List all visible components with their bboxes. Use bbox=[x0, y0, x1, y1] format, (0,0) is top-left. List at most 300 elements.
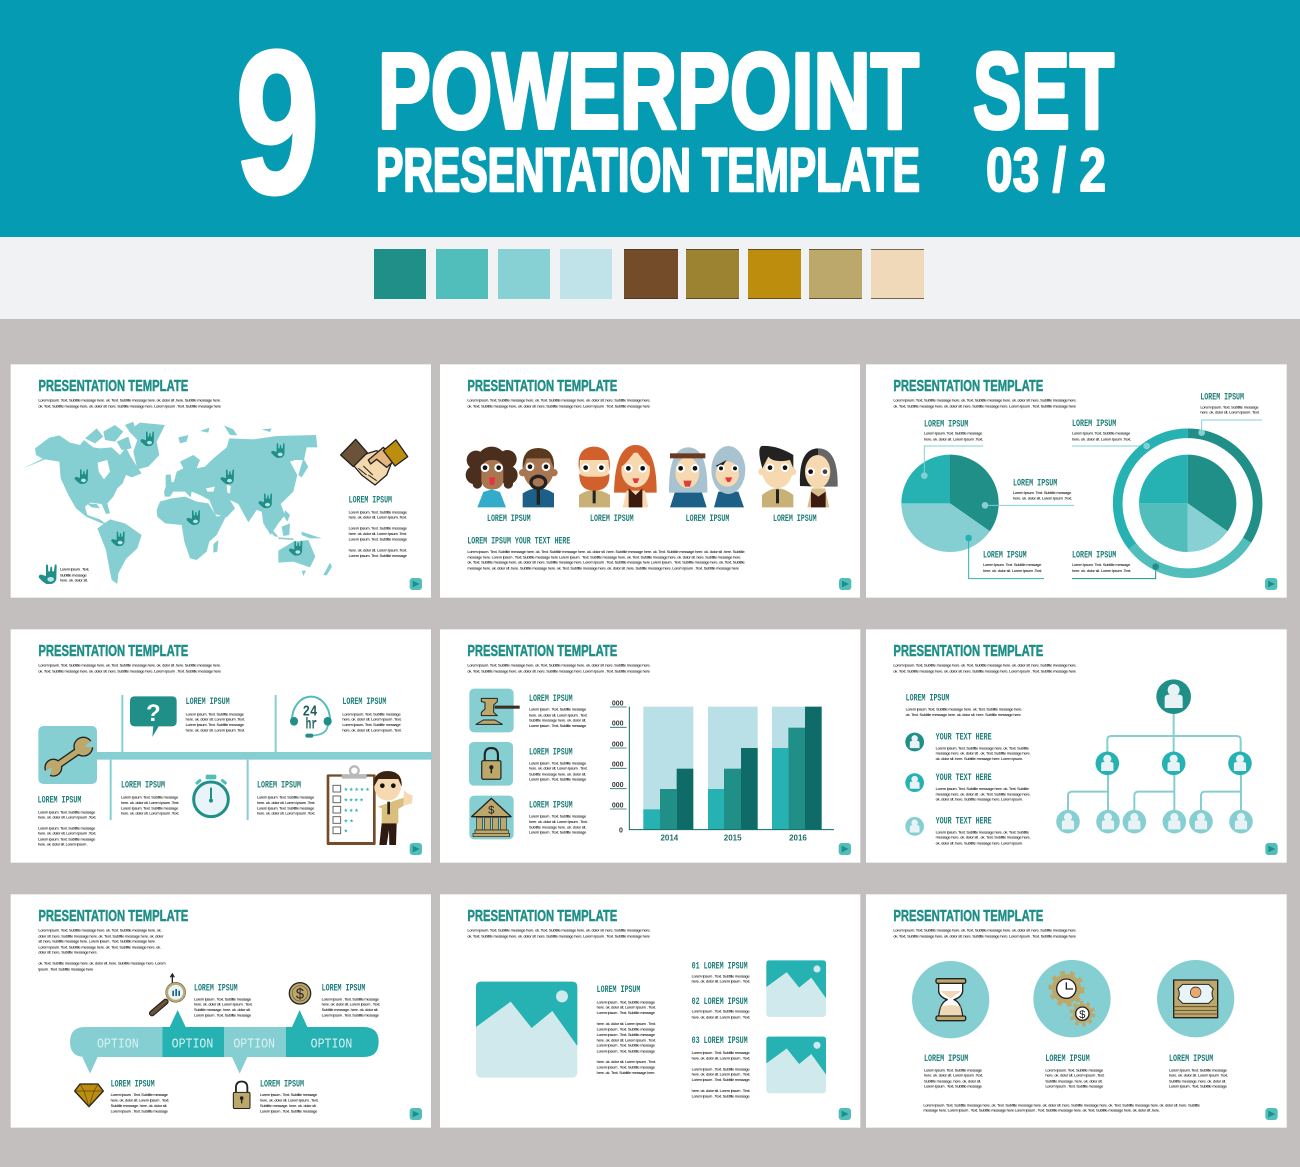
slide title: PRESENTATION TEMPLATE bbox=[467, 908, 617, 925]
axis labels: 0 bbox=[619, 827, 623, 834]
item 03: Lorem ipsum . Text. Subtitle message bbox=[692, 1066, 750, 1071]
world map bbox=[23, 422, 332, 584]
block text: question bbox=[186, 696, 245, 733]
icon: bank bbox=[469, 796, 514, 839]
text block: padlock: Lorem ipsum . Text. Subtitle message bbox=[529, 777, 587, 782]
text block: bank: Subtitle message here. ok. dolor sit. bbox=[529, 824, 586, 829]
image placeholder large bbox=[476, 982, 577, 1078]
text block: hourglass: here. ok. dolor sit. Lorem ipsum .Text. bbox=[924, 1073, 983, 1078]
icon: magnifier bbox=[152, 974, 185, 1013]
year labels: 2016 bbox=[789, 834, 807, 843]
block text: stopwatch: here. ok. dolor sit. Lorem ipsum .Text. bbox=[121, 800, 179, 805]
list item one: YOUR TEXT HERE bbox=[936, 731, 992, 742]
text block: padlock bbox=[529, 746, 588, 782]
bottom paragraph: message here. Lorem ipsum . Text. Subtitle message here Lorem ipsum . Text. Subtitle message here. ok. Text. Subtitle message here. ok. dolor sit .here. bbox=[923, 1108, 1160, 1113]
block text: stopwatch: LOREM IPSUM bbox=[121, 780, 165, 791]
text block: gears: Lorem ipsum . Text. Subtitle message bbox=[1045, 1084, 1104, 1089]
text block: magnifier: Subtitle message. here. ok. dolor sit. bbox=[194, 1007, 251, 1012]
option labels: OPTION bbox=[172, 1037, 213, 1053]
item 03: here. ok. dolor sit. Lorem ipsum . Text. bbox=[692, 1072, 750, 1077]
icon: stopwatch bbox=[194, 775, 228, 817]
icon: clipboard: ★ bbox=[344, 829, 349, 835]
callout text: top left bbox=[924, 418, 983, 441]
lower paragraph: message here. ok. dolor sit .here. Subtitle message here. ok. Text. Subtitle message here. ok. dolor sit .here. Subtitle message here. Lorem ipsum . Text. Subtitle message here bbox=[467, 565, 740, 570]
block text: question: LOREM IPSUM bbox=[186, 696, 230, 707]
callout text: donut bottom: here. ok. dolor sit. Lorem ipsum .Text. bbox=[1072, 568, 1131, 573]
left block text: LOREM IPSUM bbox=[38, 794, 81, 805]
slide title: PRESENTATION TEMPLATE bbox=[893, 378, 1043, 395]
axis labels: 000 bbox=[612, 802, 624, 809]
center text block: here. ok. dolor sit. Lorem ipsum . Text. bbox=[597, 1005, 656, 1010]
callout text: top left: Lorem ipsum. Text. Subtitle message bbox=[924, 431, 983, 436]
person: bearded man bbox=[579, 447, 610, 507]
slide subtitle bbox=[893, 398, 1077, 409]
callout text: middle bbox=[1013, 478, 1072, 501]
panel: world map slide bbox=[11, 364, 431, 598]
text block: money bbox=[1169, 1053, 1228, 1089]
axis labels: 000 bbox=[612, 741, 624, 748]
slide paragraph: Lorem ipsum. Text. Subtitle message here. ok. Text. Subtitle message here. ok. bbox=[38, 944, 161, 949]
center text block: Lorem ipsum . Text. Subtitle message bbox=[597, 1043, 656, 1048]
text block: padlock: Subtitle message here. ok. dolor sit. bbox=[529, 771, 586, 776]
icon: 24 hour headset: 24 bbox=[303, 705, 317, 721]
text block: diamond: here. ok. dolor sit. Lorem ipsum . Text. bbox=[111, 1098, 169, 1103]
callout text: donut bottom: Lorem ipsum. Text. Subtitle message bbox=[1072, 562, 1131, 567]
side heading: LOREM IPSUM bbox=[349, 495, 392, 506]
text block: padlock bbox=[260, 1078, 319, 1114]
list icon: dark person bbox=[905, 733, 924, 751]
slide paragraph: ok. Text. Subtitle message here. ok. dolor sit .here. Subtitle message here. Lorem bbox=[38, 961, 166, 966]
center text block: here. ok. Text. Subtitle message here. bbox=[597, 1070, 655, 1075]
callout text: donut top right: Lorem ipsum. Text. Subtitle message bbox=[1200, 404, 1259, 409]
list item two: ok. dolor sit .here. Subtitle message here. Lorem ipsum. bbox=[936, 797, 1023, 802]
callout text: bottom left bbox=[983, 550, 1042, 573]
slide paragraph: dolor sit .here. Subtitle message here. bbox=[38, 950, 98, 955]
list item two bbox=[936, 772, 1031, 802]
left block text: Lorem ipsum. Text. Subtitle message bbox=[38, 836, 96, 841]
headline: powerpoint: POWERPOINT bbox=[378, 30, 919, 151]
slide subtitle: ok. Text. Subtitle message here. ok. dolor sit .here. Subtitle message here. Lorem ipsum . Text. Subtitle message here bbox=[38, 404, 222, 409]
slide subtitle bbox=[893, 928, 1077, 939]
year labels: 2014 bbox=[660, 834, 679, 843]
callout text: bottom left: LOREM IPSUM bbox=[983, 550, 1027, 561]
axis ticks bbox=[610, 707, 627, 809]
text block: padlock: here. ok. dolor sit. Lorem ipsum . Text. bbox=[529, 766, 588, 771]
people captions: LOREM IPSUM bbox=[487, 513, 531, 524]
left block text: here. ok. dolor sit. Lorem ipsum .Text. bbox=[38, 831, 96, 836]
item 02: here. ok. dolor sit. Lorem ipsum . Text. bbox=[692, 1014, 750, 1019]
subheading: 03 / 2: 03 / 2 bbox=[986, 136, 1106, 204]
text block: diamond: Subtitle message. here. ok. dolor sit. bbox=[111, 1103, 167, 1108]
item 01: here. ok. dolor sit. Lorem ipsum . Text. bbox=[692, 979, 750, 984]
list icon: teal person bbox=[905, 773, 924, 792]
side text: Lorem ipsum. Text. Subtitle message bbox=[349, 525, 408, 530]
item 03: Lorem ipsum . Text. Subtitle message bbox=[692, 1094, 750, 1099]
side text: here. ok. dolor sit. Lorem ipsum .Text. bbox=[349, 531, 407, 536]
list item one: ok. dolor sit .here. Subtitle message here. Lorem ipsum. bbox=[936, 756, 1023, 761]
text block: hourglass: Subtitle message. here. ok. dolor sit. bbox=[924, 1078, 981, 1083]
person: red hair woman bbox=[614, 445, 657, 507]
center text block: Lorem ipsum . Text. Subtitle message bbox=[597, 1048, 656, 1053]
panel: bar chart slide bbox=[440, 629, 860, 863]
left block text: here. ok. dolor sit. Lorem ipsum . bbox=[38, 842, 88, 847]
icon: gears: $ bbox=[1079, 1009, 1086, 1021]
slide subtitle bbox=[467, 663, 651, 674]
text block: padlock: Lorem ipsum . Text. Subtitle message bbox=[260, 1092, 318, 1097]
list item one: Lorem ipsum. Text. Subtitle message here. ok. Text. Subtitle bbox=[936, 745, 1030, 750]
block text: checklist: here. ok. dolor sit. Lorem ipsum .Text. bbox=[257, 811, 315, 816]
text block: gavel: LOREM IPSUM bbox=[529, 693, 573, 704]
text block: hourglass: LOREM IPSUM bbox=[924, 1053, 968, 1064]
callout text: donut bottom: LOREM IPSUM bbox=[1072, 550, 1116, 561]
item 03: 03 LOREM IPSUM bbox=[692, 1035, 748, 1046]
text block: hourglass: Lorem ipsum . Text. Subtitle message bbox=[924, 1084, 983, 1089]
top node bbox=[1156, 679, 1191, 714]
slide subtitle: ok. Text. Subtitle message here. ok. dolor sit .here. Subtitle message here. Lorem ipsum . Text. Subtitle message here bbox=[467, 404, 651, 409]
text block: gears bbox=[1045, 1053, 1105, 1089]
callout text: donut upper left bbox=[1072, 418, 1131, 441]
option labels: OPTION bbox=[97, 1037, 139, 1053]
item 03: here. ok. dolor sit. Lorem ipsum . Text. bbox=[692, 1055, 750, 1060]
text block: coin: Lorem ipsum . Text. Subtitle message bbox=[322, 1013, 380, 1018]
icon: handshake bbox=[341, 439, 408, 485]
item 02: Lorem ipsum . Text. Subtitle message bbox=[692, 1009, 750, 1014]
list item three: YOUR TEXT HERE bbox=[936, 815, 992, 826]
item 03: here. ok. dolor sit. Lorem ipsum . Text. bbox=[692, 1088, 750, 1093]
slide subtitle: Lorem ipsum. Text. Subtitle message here. ok. Text. Subtitle message here. ok. dolor sit .here. Subtitle message here. bbox=[893, 928, 1077, 933]
block text: stopwatch: Lorem ipsum. Text. Subtitle message bbox=[121, 794, 179, 799]
slide subtitle: ok. Text. Subtitle message here. ok. dolor sit .here. Subtitle message here. Lorem ipsum . Text. Subtitle message here bbox=[467, 669, 651, 674]
slide subtitle: Lorem ipsum. Text. Subtitle message here. ok. Text. Subtitle message here. ok. dolor sit .here. Subtitle message here. bbox=[893, 663, 1077, 668]
slide subtitle: Lorem ipsum. Text. Subtitle message here. ok. Text. Subtitle message here. ok. dolor sit .here. Subtitle message here. bbox=[467, 663, 651, 668]
text block: diamond: Lorem ipsum . Text. Subtitle message bbox=[111, 1092, 169, 1097]
panel: people slide bbox=[440, 364, 860, 598]
text block: gavel: Subtitle message here. ok. dolor sit. bbox=[529, 718, 586, 723]
people captions: LOREM IPSUM bbox=[773, 513, 817, 524]
org chart bbox=[1056, 679, 1253, 833]
block text: headset: here. ok. dolor sit. Lorem ipsum .Text. bbox=[342, 728, 402, 733]
slide subtitle: ok. Text. Subtitle message here. ok. dolor sit .here. Subtitle message here. Lorem ipsum . Text. Subtitle message here bbox=[893, 404, 1077, 409]
axis labels: 000 bbox=[612, 721, 624, 728]
bottom paragraph bbox=[923, 1102, 1201, 1113]
text block: diamond: LOREM IPSUM bbox=[111, 1078, 155, 1089]
intro text: ok. Text. Subtitle message here. ok. dolor sit .here. Subtitle message here. bbox=[906, 712, 1022, 717]
person: man with goatee bbox=[519, 448, 558, 507]
item 01: Lorem ipsum . Text. Subtitle message bbox=[692, 973, 750, 978]
chart: pie left bbox=[901, 455, 999, 552]
panel: org chart slide bbox=[866, 629, 1287, 863]
middle nodes bbox=[1096, 752, 1252, 775]
block text: checklist bbox=[257, 780, 315, 816]
slide title: PRESENTATION TEMPLATE bbox=[467, 378, 617, 395]
side text bbox=[349, 509, 408, 558]
big number 9: 9 bbox=[235, 8, 320, 237]
slide paragraph: Lorem ipsum. Text. Subtitle message here. ok. Text. Subtitle message here. ok. bbox=[38, 928, 162, 933]
axis labels: 000 bbox=[612, 762, 624, 769]
callout text: bottom left: Lorem ipsum. Text. Subtitle message bbox=[983, 562, 1042, 567]
slide title: PRESENTATION TEMPLATE bbox=[467, 643, 617, 660]
callout text: top left: here. ok. dolor sit. Lorem ipsum .Text. bbox=[924, 436, 983, 441]
legend text: here. ok. dolor sit. bbox=[60, 578, 88, 583]
icon: question bubble bbox=[130, 696, 177, 737]
text block: magnifier: Lorem ipsum . Text. Subtitle message bbox=[194, 996, 252, 1001]
text block: money: LOREM IPSUM bbox=[1169, 1053, 1213, 1064]
header banner bbox=[0, 0, 1300, 237]
side text: here. ok. dolor sit. Lorem ipsum .Text. bbox=[349, 547, 407, 552]
colour palette strip bbox=[0, 237, 1300, 319]
icon: 24 hour headset bbox=[290, 697, 332, 738]
text block: money: Subtitle message. here. ok. dolor sit. bbox=[1169, 1078, 1226, 1083]
legend text bbox=[60, 567, 89, 583]
lower paragraph: ok. Text. Subtitle message here. ok. dolor sit .here. Subtitle message here. Lorem ipsum . Text. Subtitle message here Lorem ipsum . Text. Subtitle message here. ok. Text. Subtitle bbox=[467, 560, 745, 565]
bar chart bbox=[610, 700, 834, 843]
slide title: PRESENTATION TEMPLATE bbox=[893, 908, 1043, 925]
panel: timeline slide bbox=[11, 629, 432, 863]
text block: magnifier bbox=[194, 982, 253, 1018]
option labels: OPTION bbox=[233, 1037, 275, 1053]
intro text: LOREM IPSUM bbox=[906, 693, 949, 704]
slide subtitle: Lorem ipsum. Text. Subtitle message here. ok. Text. Subtitle message here. ok. dolor sit .here. Subtitle message here. bbox=[467, 398, 651, 403]
lower paragraph bbox=[467, 549, 745, 570]
text block: gavel: Lorem ipsum . Text. Subtitle message bbox=[529, 707, 587, 712]
figure: man with thumb up bbox=[374, 771, 413, 845]
text block: padlock: LOREM IPSUM bbox=[260, 1078, 304, 1089]
block text: question: Lorem ipsum. Text. Subtitle message bbox=[186, 722, 245, 727]
slide subtitle: ok. Text. Subtitle message here. ok. dolor sit .here. Subtitle message here. Lorem ipsum . Text. Subtitle message here bbox=[467, 934, 651, 939]
icon: question bubble: ? bbox=[146, 700, 161, 727]
block text: stopwatch: here. ok. dolor sit. Lorem ipsum .Text. bbox=[121, 811, 179, 816]
legend text: Subtitle message bbox=[60, 572, 87, 577]
text block: gears: Lorem ipsum. Text. Subtitle message bbox=[1045, 1067, 1104, 1072]
icon: clipboard: ★★★★★ bbox=[344, 787, 370, 793]
list item three: message here. ok. dolor sit . ok. Text. Subtitle message here. bbox=[936, 835, 1031, 840]
slide paragraph: dolor sit .here. Subtitle message here. ok. Text. Subtitle message here. ok. dolor bbox=[38, 933, 164, 938]
text block: gavel: here. ok. dolor sit. Lorem ipsum . Text. bbox=[529, 712, 588, 717]
callout text: donut top right: here. ok. dolor sit. Lorem ipsum .Text. bbox=[1200, 410, 1260, 415]
pie left callouts bbox=[924, 420, 1262, 579]
callout text: donut bottom bbox=[1072, 550, 1131, 573]
block text: stopwatch: Lorem ipsum. Text. Subtitle message bbox=[121, 805, 179, 810]
center text block: Lorem ipsum . Text. Subtitle message bbox=[597, 1026, 656, 1031]
connectors bbox=[1068, 713, 1241, 810]
icon: play button bbox=[410, 578, 422, 590]
icon: clipboard: ★★★★ bbox=[344, 798, 364, 804]
slide subtitle: ok. Text. Subtitle message here. ok. dolor sit .here. Subtitle message here. Lorem ipsum . Text. Subtitle message here bbox=[893, 934, 1077, 939]
list item two: Lorem ipsum. Text. Subtitle message here. ok. Text. Subtitle bbox=[936, 786, 1030, 791]
icon: padlock bbox=[233, 1081, 250, 1109]
year labels: 2015 bbox=[724, 834, 742, 843]
text block: magnifier: LOREM IPSUM bbox=[194, 982, 238, 993]
callout text: middle: LOREM IPSUM bbox=[1013, 478, 1057, 489]
text block: diamond: Lorem ipsum . Text. Subtitle message bbox=[111, 1109, 169, 1114]
headline: set: SET bbox=[973, 30, 1114, 151]
slide subtitle: Lorem ipsum. Text. Subtitle message here. ok. Text. Subtitle message here. ok. dolor sit .here. Subtitle message here. bbox=[893, 398, 1077, 403]
option labels: OPTION bbox=[311, 1037, 352, 1053]
item 03: Lorem ipsum . Text. Subtitle message bbox=[692, 1077, 750, 1082]
list item three: Lorem ipsum. Text. Subtitle message here. ok. Text. Subtitle bbox=[936, 829, 1030, 834]
lower heading: LOREM IPSUM YOUR TEXT HERE bbox=[467, 536, 570, 547]
axis labels bbox=[612, 700, 624, 834]
text block: padlock: LOREM IPSUM bbox=[529, 746, 573, 757]
slide subtitle: Lorem ipsum. Text. Subtitle message here. ok. Text. Subtitle message here. ok. dolor sit .here. Subtitle message here. bbox=[38, 398, 221, 403]
text block: money: Lorem ipsum . Text. Subtitle message bbox=[1169, 1084, 1228, 1089]
slide paragraph bbox=[38, 928, 166, 971]
intro text: Lorem ipsum. Text. Subtitle message here. ok. Text. Subtitle message here. bbox=[906, 707, 1022, 712]
panel: image placeholders slide bbox=[440, 894, 860, 1128]
map markers bbox=[74, 431, 302, 555]
slide subtitle bbox=[467, 398, 651, 409]
person: curly hair woman bbox=[466, 447, 518, 507]
block text: checklist: Lorem ipsum. Text. Subtitle message bbox=[257, 794, 315, 799]
text block: hourglass bbox=[924, 1053, 983, 1089]
timeline bars bbox=[97, 695, 432, 820]
text block: coin: here. ok. dolor sit. Lorem ipsum . Text. bbox=[322, 1002, 380, 1007]
text block: gears: Subtitle message. here. ok. dolor sit. bbox=[1045, 1078, 1103, 1083]
option labels bbox=[97, 1037, 352, 1053]
block text: question: here. ok. dolor sit. Lorem ipsum .Text. bbox=[186, 728, 245, 733]
callout text: top left: LOREM IPSUM bbox=[924, 418, 968, 429]
block text: question: Lorem ipsum. Text. Subtitle message bbox=[186, 711, 245, 716]
text block: bank: LOREM IPSUM bbox=[529, 800, 573, 811]
list item two: YOUR TEXT HERE bbox=[936, 772, 992, 783]
text block: money: here. ok. dolor sit. Lorem ipsum .Text. bbox=[1169, 1073, 1228, 1078]
text block: coin: LOREM IPSUM bbox=[322, 982, 365, 993]
text block: coin bbox=[322, 982, 380, 1018]
side text: Lorem ipsum. Text. Subtitle message bbox=[349, 509, 408, 514]
slide title: PRESENTATION TEMPLATE bbox=[38, 378, 188, 395]
list item one: message here. ok. dolor sit . ok. Text. Subtitle message here. bbox=[936, 751, 1031, 756]
slide subtitle: Lorem ipsum. Text. Subtitle message here. ok. Text. Subtitle message here. ok. dolor sit .here. Subtitle message here. bbox=[467, 928, 651, 933]
callout text: donut upper left: here. ok. dolor sit. Lorem ipsum .Text. bbox=[1072, 436, 1131, 441]
text block: money: Lorem ipsum. Text. Subtitle message bbox=[1169, 1067, 1228, 1072]
slide paragraph: ipsum . Text. Subtitle message here bbox=[38, 966, 94, 971]
text block: bank: Lorem ipsum . Text. Subtitle message bbox=[529, 813, 587, 818]
slide subtitle bbox=[38, 398, 222, 409]
icon: dollar coin: $ bbox=[296, 987, 304, 1003]
icon: wrench bbox=[38, 726, 97, 784]
icon: padlock bbox=[469, 742, 513, 786]
icon: bank: $ bbox=[488, 804, 495, 816]
text block: diamond bbox=[111, 1078, 169, 1114]
center text block: here. ok. dolor sit. Lorem ipsum . Text. bbox=[597, 1037, 656, 1042]
item 01 bbox=[692, 961, 750, 984]
item 03 bbox=[692, 1035, 750, 1099]
side text: Lorem ipsum. Text. Subtitle message bbox=[349, 553, 408, 558]
person: woman with bob hair bbox=[800, 448, 838, 507]
icon: clipboard: ★★★ bbox=[344, 808, 359, 814]
center text block: here. ok. dolor sit. Lorem ipsum . Text. bbox=[597, 1059, 656, 1064]
left block text: here. ok. dolor sit. Lorem ipsum .Text. bbox=[38, 815, 96, 820]
icon: clipboard: ★★ bbox=[344, 818, 354, 824]
icon: play button bbox=[410, 1108, 422, 1120]
option bar bbox=[70, 1010, 379, 1074]
callout text: middle: here. ok. dolor sit. Lorem ipsum .Text. bbox=[1013, 496, 1072, 501]
center text block: LOREM IPSUM bbox=[597, 984, 640, 995]
item 02 bbox=[692, 996, 750, 1019]
center text block: Lorem ipsum . Text. Subtitle message bbox=[597, 1010, 656, 1015]
slide subtitle bbox=[467, 928, 651, 939]
slide subtitle bbox=[38, 663, 222, 674]
text block: bank bbox=[529, 800, 588, 835]
icon: play button bbox=[410, 843, 422, 855]
text block: magnifier: here. ok. dolor sit. Lorem ipsum . Text. bbox=[194, 1002, 253, 1007]
icon: play button bbox=[1265, 843, 1278, 855]
subheading: presentation template: PRESENTATION TEMPLATE bbox=[376, 136, 920, 204]
callout text: bottom left: here. ok. dolor sit. Lorem ipsum .Text. bbox=[983, 568, 1042, 573]
person: man in tan shirt bbox=[758, 446, 796, 507]
callout text: donut top right bbox=[1200, 391, 1260, 415]
hudson bay and inland seas bbox=[98, 460, 231, 493]
center text block bbox=[597, 984, 656, 1075]
icon: diamond bbox=[75, 1084, 103, 1107]
callout text: donut upper left: LOREM IPSUM bbox=[1072, 418, 1116, 429]
bottom nodes bbox=[1056, 810, 1253, 833]
slide subtitle: Lorem ipsum. Text. Subtitle message here. ok. Text. Subtitle message here. ok. dolor sit .here. Subtitle message here. bbox=[38, 663, 221, 668]
callout text: middle: Lorem ipsum. Text. Subtitle message bbox=[1013, 490, 1072, 495]
icon: play button bbox=[839, 1108, 851, 1120]
callout text: donut upper left: Lorem ipsum. Text. Subtitle message bbox=[1072, 430, 1131, 435]
lower paragraph: Lorem ipsum. Text. Subtitle message here. ok. Text. Subtitle message here. ok. dolor sit .here. Subtitle message here. ok. Text. Subtitle message here. ok. dolor sit .here. Subtitle bbox=[467, 549, 745, 554]
image placeholder small top bbox=[766, 960, 826, 1017]
item 02: 02 LOREM IPSUM bbox=[692, 996, 748, 1007]
people captions: LOREM IPSUM bbox=[686, 513, 729, 524]
block text: headset: Lorem ipsum. Text. Subtitle message bbox=[342, 722, 401, 727]
block text: headset: Lorem ipsum. Text. Subtitle message bbox=[342, 711, 401, 716]
list item one bbox=[936, 731, 1031, 761]
slide paragraph: sit .here. Subtitle message here. Lorem ipsum . Text. Subtitle message here bbox=[38, 939, 156, 944]
icon: hourglass bbox=[912, 961, 989, 1038]
text block: bank: Lorem ipsum . Text. Subtitle message bbox=[529, 830, 587, 835]
center text block: here. ok. dolor sit. Lorem ipsum . Text. bbox=[597, 1021, 656, 1026]
item 03: Lorem ipsum . Text. Subtitle message bbox=[692, 1050, 750, 1055]
block text: question: here. ok. dolor sit. Lorem ipsum .Text. bbox=[186, 717, 245, 722]
icon: clipboard bbox=[327, 766, 376, 845]
icon: money stack bbox=[1157, 960, 1234, 1037]
center text block: Lorem ipsum . Text. Subtitle message bbox=[597, 1032, 656, 1037]
side text: here. ok. dolor sit. Lorem ipsum .Text. bbox=[349, 515, 407, 520]
list icon: light person bbox=[905, 817, 924, 836]
people captions: LOREM IPSUM bbox=[590, 513, 634, 524]
list item three bbox=[936, 815, 1031, 845]
list item three: ok. dolor sit .here. Subtitle message here. Lorem ipsum. bbox=[936, 840, 1023, 845]
callout dots bbox=[921, 472, 988, 541]
icon: dollar coin bbox=[289, 983, 311, 1004]
block text: headset: here. ok. dolor sit. Lorem ipsum .Text. bbox=[342, 717, 402, 722]
slide subtitle: ok. Text. Subtitle message here. ok. dolor sit .here. Subtitle message here. Lorem ipsum . Text. Subtitle message here bbox=[893, 669, 1077, 674]
slide subtitle bbox=[893, 663, 1077, 674]
legend text: Lorem ipsum . Text. bbox=[60, 567, 89, 572]
text block: gears: here. ok. dolor sit. Lorem ipsum .Text. bbox=[1045, 1073, 1105, 1078]
panel: options slide bbox=[11, 894, 431, 1128]
icon: play button bbox=[839, 843, 851, 855]
slide subtitle: ok. Text. Subtitle message here. ok. dolor sit .here. Subtitle message here. Lorem ipsum . Text. Subtitle message here bbox=[38, 669, 222, 674]
icon: play button bbox=[839, 578, 851, 590]
item 01: 01 LOREM IPSUM bbox=[692, 961, 748, 972]
text block: coin: Subtitle message. here. ok. dolor sit. bbox=[322, 1007, 378, 1012]
panel: three circles slide bbox=[866, 894, 1287, 1128]
person: man with keffiyeh bbox=[669, 447, 707, 507]
text block: gavel: Lorem ipsum . Text. Subtitle message bbox=[529, 723, 587, 728]
intro text bbox=[906, 693, 1022, 717]
lower paragraph: message here. Lorem ipsum . Text. Subtitle message here Lorem ipsum . Text. Subtitle message here. ok. Text. Subtitle message here. ok. dolor sit .here. Subtitle message here. bbox=[467, 554, 741, 559]
axis labels: 000 bbox=[612, 782, 624, 789]
block text: checklist: here. ok. dolor sit. Lorem ipsum .Text. bbox=[257, 800, 315, 805]
panel: pie chart slide bbox=[866, 364, 1287, 598]
block text: stopwatch bbox=[121, 780, 179, 816]
left block text: Lorem ipsum. Text. Subtitle message bbox=[38, 825, 96, 830]
text block: bank: here. ok. dolor sit. Lorem ipsum . Text. bbox=[529, 819, 588, 824]
legend icon bbox=[39, 564, 57, 584]
